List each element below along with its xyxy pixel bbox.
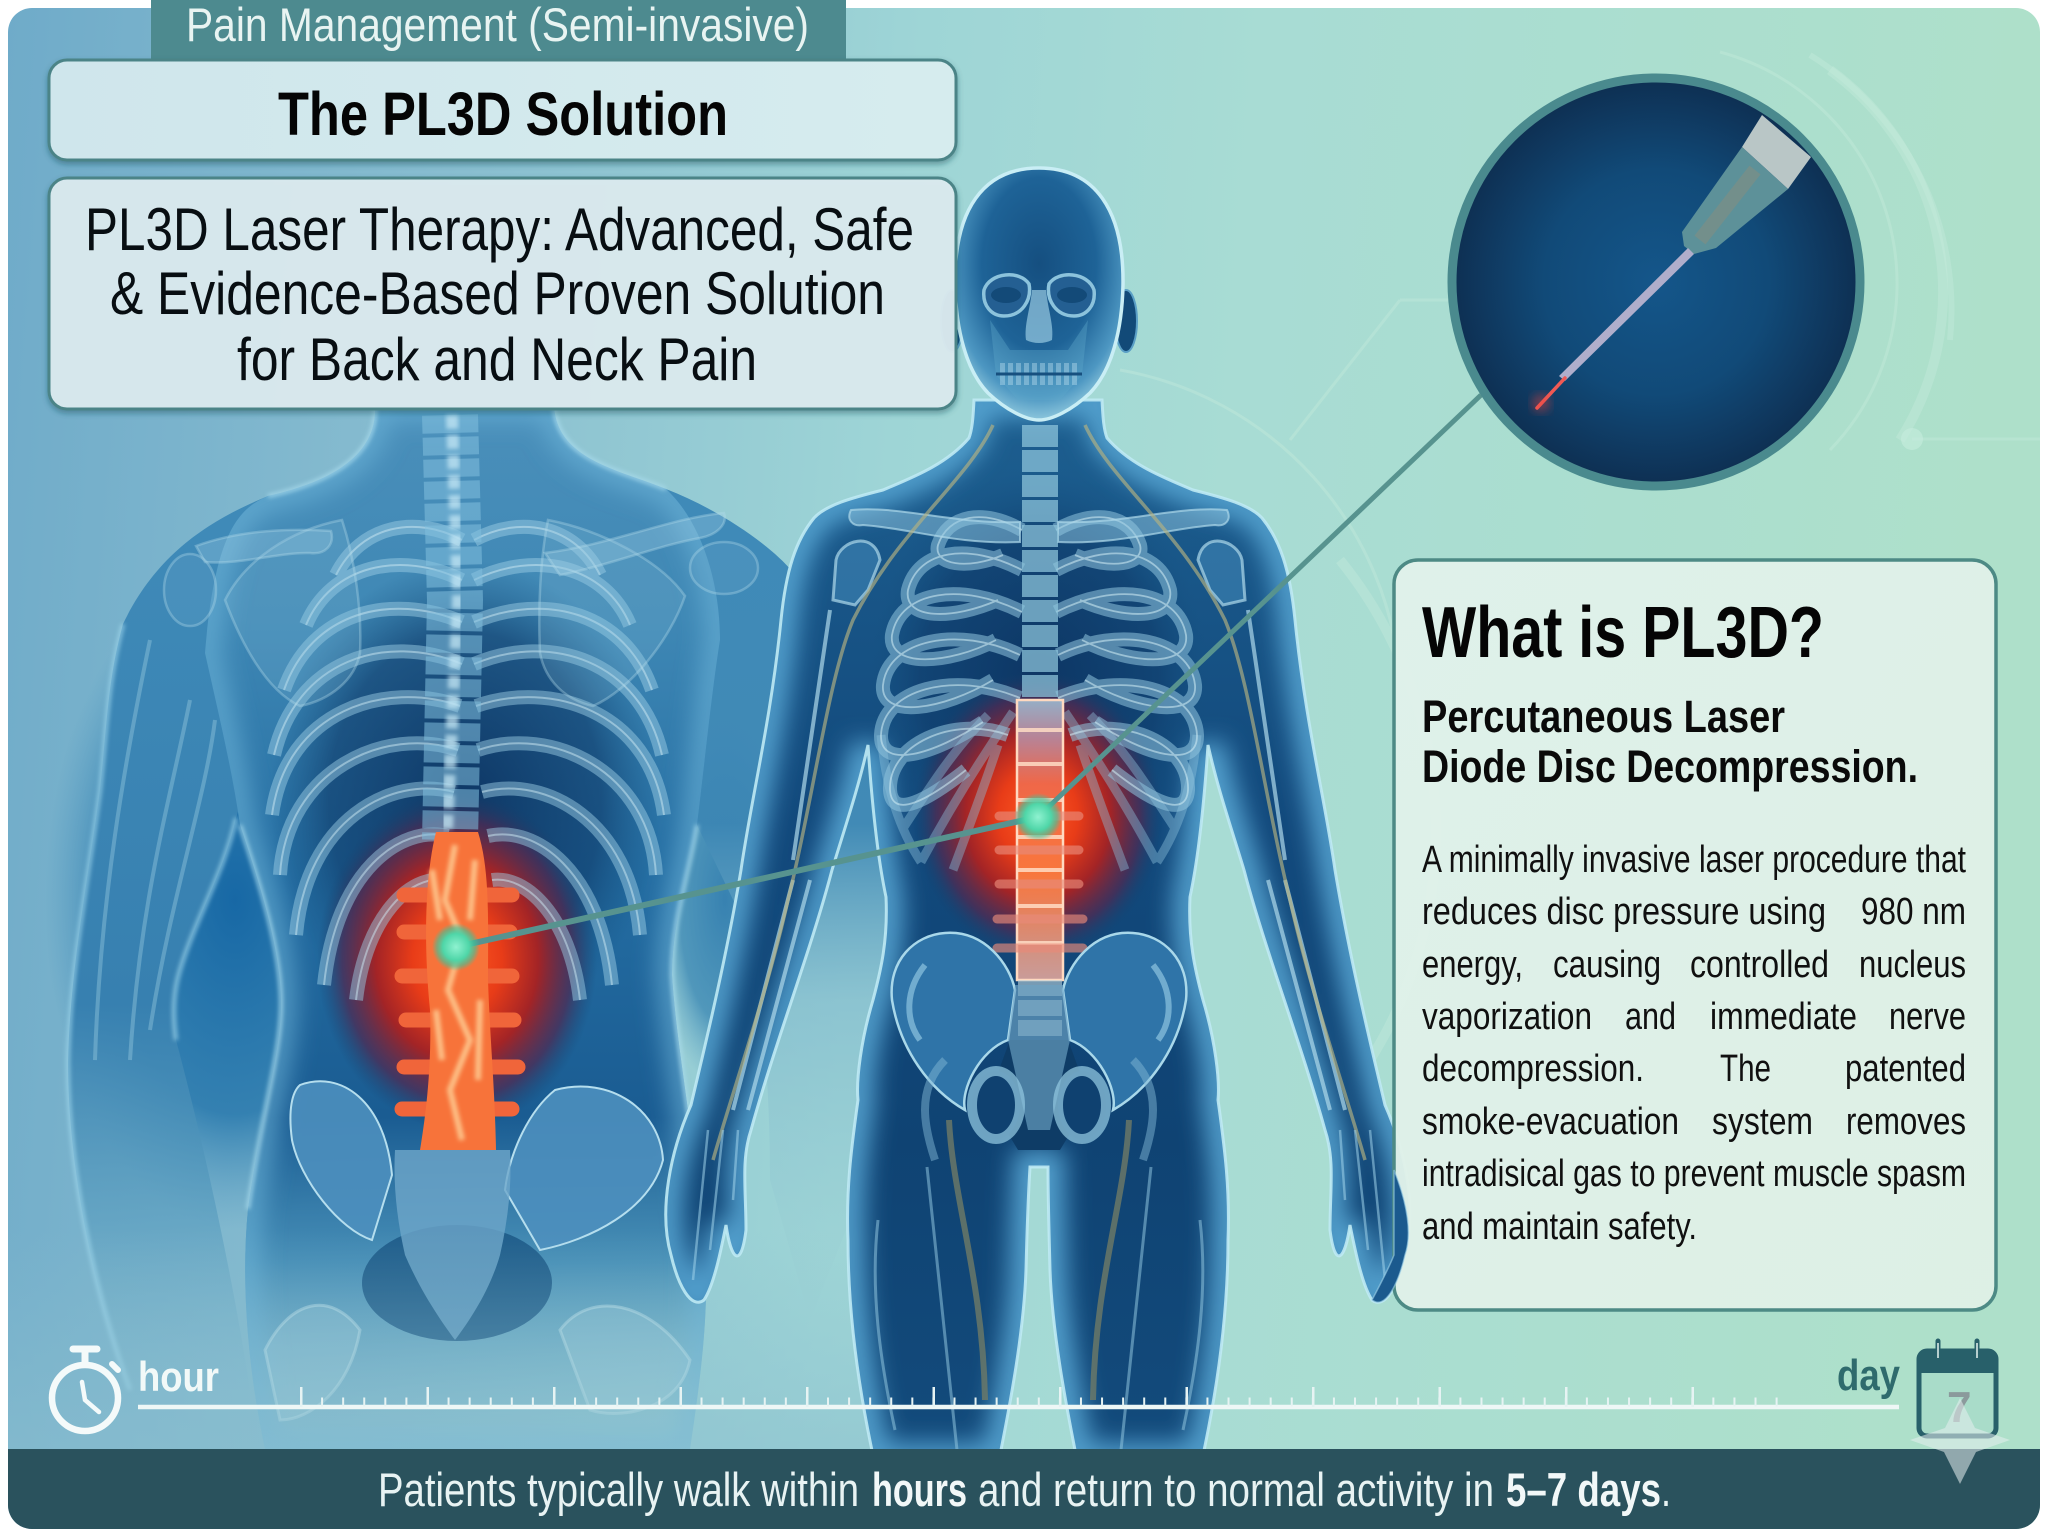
body text: system xyxy=(1712,1101,1813,1143)
front figure: glowing lumbar spine xyxy=(997,700,1083,1070)
back figure: upper spine xyxy=(446,415,458,850)
front figure xyxy=(666,168,1410,1460)
panel: what is PL3D xyxy=(1394,560,1996,1310)
footer band: . xyxy=(1661,1463,1671,1516)
front figure: ears xyxy=(941,290,1137,352)
heading: what is PL3D: What is PL3D? xyxy=(1422,593,1824,673)
front figure: head xyxy=(955,168,1123,420)
title box: The PL3D Solution xyxy=(278,80,728,148)
body text: removes xyxy=(1846,1101,1966,1143)
callout line: back spine to front spine xyxy=(456,817,1038,947)
front figure: skull xyxy=(984,275,1094,400)
marker: back spine xyxy=(432,923,480,971)
body text: controlled xyxy=(1690,944,1829,986)
footer band: hours xyxy=(872,1463,967,1516)
front figure: clavicles and shoulder joints xyxy=(733,509,1345,1110)
back figure: glowing lumbar spine xyxy=(402,832,518,1150)
subtitle box: for Back and Neck Pain xyxy=(237,326,757,393)
body text: energy, xyxy=(1422,944,1523,986)
front figure: pelvis xyxy=(875,933,1203,1450)
body text: and maintain safety. xyxy=(1422,1206,1697,1248)
body text: reduces disc pressure using xyxy=(1422,891,1826,933)
label: day: day xyxy=(1837,1351,1900,1400)
callout line: front spine to needle lens xyxy=(1038,395,1481,817)
icon: laser needle xyxy=(1532,115,1811,412)
back figure: right arm xyxy=(666,489,885,1126)
body text xyxy=(1422,839,1966,1248)
front figure: pain glow xyxy=(913,670,1163,960)
subheading: percutaneous laser diode disc decompression: Diode Disc Decompression. xyxy=(1422,741,1918,792)
body text: vaporization xyxy=(1422,996,1592,1038)
front figure: nerves xyxy=(713,425,1365,1400)
subheading: percutaneous laser diode disc decompression: Percutaneous Laser xyxy=(1422,691,1785,742)
icon: sparkle xyxy=(1910,1398,2010,1484)
subtitle box: & Evidence-Based Proven Solution xyxy=(110,260,885,327)
subheading: percutaneous laser diode disc decompression xyxy=(1422,691,1918,792)
footer band: Patients typically walk within xyxy=(378,1463,859,1516)
body text: The xyxy=(1720,1048,1771,1090)
icon: front figure fingers over panel xyxy=(1372,1170,1408,1302)
label: hour: hour xyxy=(138,1353,219,1400)
front figure: hand detail xyxy=(693,1130,1385,1280)
back figure xyxy=(68,405,900,1449)
front figure: upper spine xyxy=(1022,425,1058,700)
marker: front spine xyxy=(1014,793,1062,841)
body text: decompression. xyxy=(1422,1048,1644,1090)
body text: immediate xyxy=(1710,996,1857,1038)
needle lens xyxy=(1452,78,1860,486)
icon: calendar day 7 xyxy=(1919,1341,1996,1436)
back figure: torso xyxy=(205,405,720,1449)
back figure: left arm xyxy=(65,496,268,1388)
front figure: ribs xyxy=(881,517,1197,870)
body text: nucleus xyxy=(1859,944,1966,986)
subtitle box: PL3D Laser Therapy: Advanced, Safe xyxy=(85,196,914,263)
subtitle box xyxy=(49,178,956,409)
body text: patented xyxy=(1845,1048,1966,1090)
timeline xyxy=(138,1351,1900,1407)
footer band xyxy=(8,1449,2040,1529)
body text: nerve xyxy=(1889,996,1966,1038)
footer band: and return to normal activity in xyxy=(978,1463,1494,1516)
body text: causing xyxy=(1553,944,1661,986)
icon: stopwatch xyxy=(52,1349,118,1431)
back figure: pelvis xyxy=(265,1081,690,1420)
body text: and xyxy=(1625,996,1676,1038)
back figure: pain glow xyxy=(323,804,592,1118)
footer band: 5–7 days xyxy=(1506,1463,1661,1516)
front figure: body silhouette xyxy=(666,400,1410,1460)
title box xyxy=(49,60,956,160)
icon: calendar day 7: 7 xyxy=(1947,1383,1971,1432)
back figure: scapulae and clavicles xyxy=(164,513,758,706)
body text: smoke-evacuation xyxy=(1422,1101,1679,1143)
body text: 980 nm xyxy=(1861,891,1966,933)
back figure: ribs xyxy=(272,527,664,1000)
